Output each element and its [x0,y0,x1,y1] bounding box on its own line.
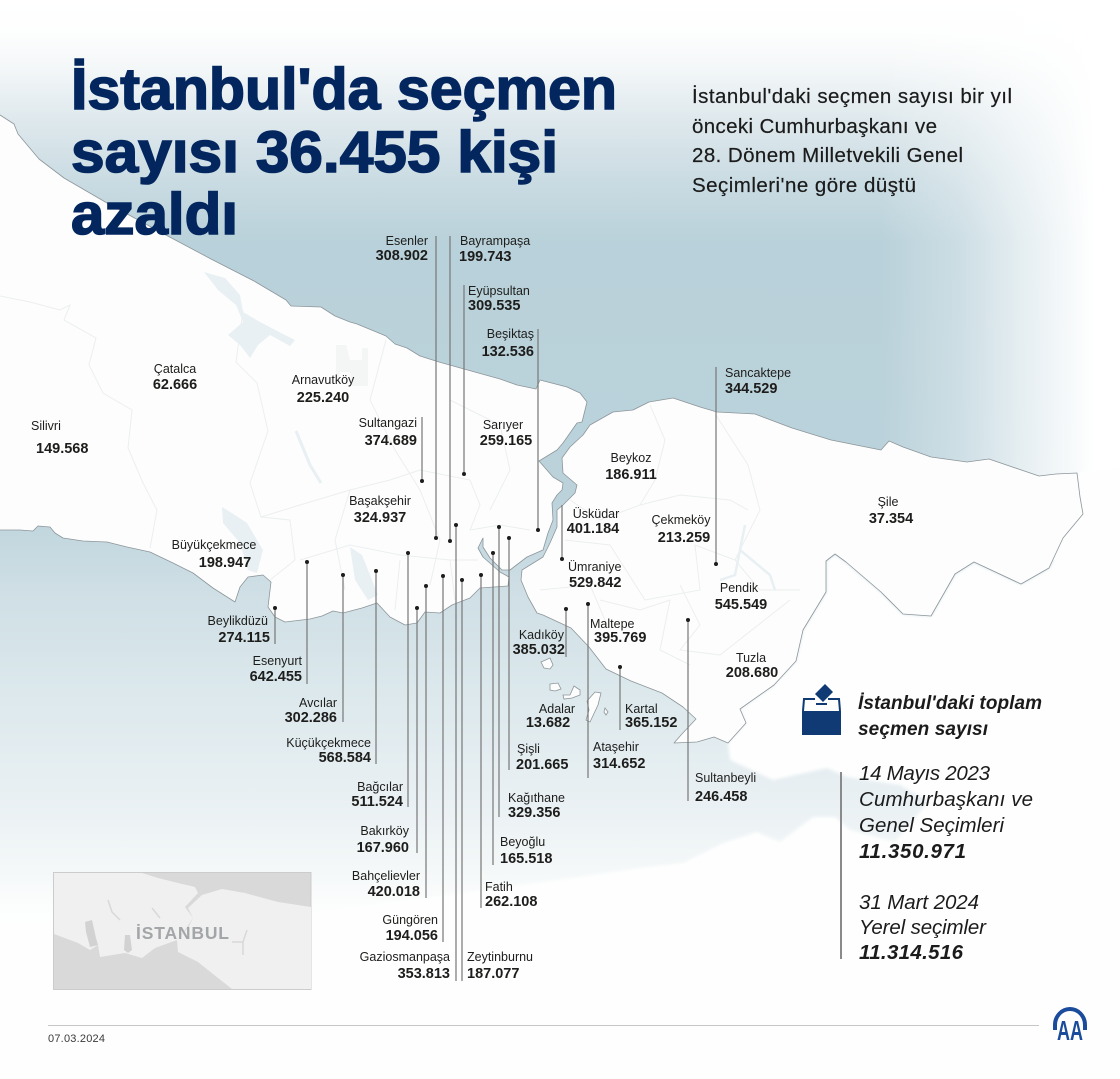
Ümraniye [568,560,622,591]
Arnavutköy: 225.240 [297,390,349,406]
Şişli [507,536,568,773]
Ümraniye: 529.842 [569,575,621,591]
map: eastern and southern surrounding land [0,465,1120,1079]
map: faint tower mark [336,345,368,386]
Avcılar: Avcılar [299,696,337,710]
Bayrampaşa: Bayrampaşa [460,234,530,248]
Fatih [479,573,537,910]
Beyoğlu: Beyoğlu [500,835,545,849]
Sarıyer: 259.165 [480,433,532,449]
Küçükçekmece [286,569,378,766]
Tuzla: 208.680 [726,665,778,681]
14 Mayıs 2023 figures: Genel Seçimleri [859,814,1005,837]
Sancaktepe: Sancaktepe [725,366,791,380]
Esenler: Esenler [386,234,428,248]
Sultanbeyli: 246.458 [695,789,747,805]
Esenyurt: 642.455 [250,669,302,685]
Büyükçekmece: 198.947 [199,555,251,571]
subtitle text block: Seçimleri'ne göre düştü [692,174,916,197]
subtitle text block: İstanbul'daki seçmen sayısı bir yıl [692,85,1012,108]
Silivri: 149.568 [36,441,88,457]
logo: AA [1055,1009,1085,1046]
31 Mart 2024 figures: Yerel seçimler [859,916,987,939]
14 Mayıs 2023 figures: 14 Mayıs 2023 [859,762,991,785]
title: azaldı [71,182,238,247]
Güngören [382,574,445,944]
Zeytinburnu: Zeytinburnu [467,950,533,964]
Fatih: 262.108 [485,894,537,910]
footer rule [48,1025,1039,1026]
Küçükçekmece: 568.584 [319,750,371,766]
Bakırköy: Bakırköy [360,824,410,838]
subtitle text block: önceki Cumhurbaşkanı ve [692,115,937,138]
Beyoğlu: 165.518 [500,851,552,867]
Bahçelievler: 420.018 [368,884,420,900]
inset locator map [54,872,311,990]
Beylikdüzü: 274.115 [218,630,270,646]
Adalar [526,702,575,731]
Ataşehir: 314.652 [593,756,645,772]
Güngören: Güngören [382,913,438,927]
subtitle text block: 28. Dönem Milletvekili Genel [692,144,963,167]
Beşiktaş [482,327,540,532]
date: 07.03.2024 [48,1033,105,1045]
Beşiktaş: 132.536 [482,344,534,360]
Tuzla [726,651,778,681]
Beykoz: Beykoz [610,451,652,465]
Çekmeköy: 213.259 [658,530,710,546]
Şişli: Şişli [517,742,540,756]
Ataşehir [586,602,645,778]
Avcılar [285,573,345,726]
Beykoz: 186.911 [605,467,657,483]
Fatih: Fatih [485,880,513,894]
legend divider bar [840,772,842,959]
Zeytinburnu: 187.077 [467,966,519,982]
Maltepe [590,617,646,646]
Ataşehir: Ataşehir [593,740,639,754]
map: European side of Istanbul [0,113,587,625]
Silivri [31,419,88,457]
Gaziosmanpaşa: 353.813 [398,966,450,982]
Başakşehir: Başakşehir [349,494,411,508]
Eyüpsultan: Eyüpsultan [468,284,530,298]
Maltepe: Maltepe [590,617,635,631]
Sultangazi: Sultangazi [359,416,417,430]
Çekmeköy: Çekmeköy [651,513,711,527]
Bağcılar [351,551,410,810]
map: Asian side of Istanbul [521,398,1083,743]
Sultangazi [359,416,424,483]
Beylikdüzü: Beylikdüzü [208,614,268,628]
Esenyurt: Esenyurt [253,654,303,668]
Kartal: 365.152 [625,715,677,731]
Çatalca [153,362,197,393]
Eyüpsultan [462,284,530,476]
Kadıköy: 385.032 [513,642,565,658]
31 Mart 2024 figures: 31 Mart 2024 [859,891,979,914]
Maltepe: 395.769 [594,630,646,646]
Silivri: Silivri [31,419,61,433]
Beyoğlu [491,551,552,867]
Şile [869,495,913,527]
Avcılar: 302.286 [285,710,337,726]
Bağcılar: 511.524 [351,794,403,810]
Kağıthane [497,525,565,821]
Sarıyer: Sarıyer [483,418,523,432]
Eyüpsultan: 309.535 [468,298,520,314]
Ümraniye: Ümraniye [568,560,622,574]
Pendik [715,581,767,613]
logo: AA: AA [1057,1015,1083,1046]
Zeytinburnu [460,578,533,982]
legend heading: İstanbul'daki toplam [858,693,1042,714]
Bağcılar: Bağcılar [357,780,403,794]
Kadıköy: Kadıköy [519,628,565,642]
Arnavutköy: Arnavutköy [292,373,355,387]
Gaziosmanpaşa [360,523,458,982]
Adalar: Adalar [539,702,575,716]
inset label: İSTANBUL [136,923,229,943]
legend heading: seçmen sayısı [858,719,988,740]
Çatalca: Çatalca [154,362,196,376]
icon: ballot box [802,684,841,735]
Beşiktaş: Beşiktaş [487,327,534,341]
map: Princes' Islands [541,658,608,722]
title: sayısı 36.455 kişi [71,120,558,185]
Güngören: 194.056 [386,928,438,944]
14 Mayıs 2023 figures: Cumhurbaşkanı ve [859,788,1033,811]
Büyükçekmece: Büyükçekmece [172,538,256,552]
subtitle text block [692,85,1012,197]
Esenyurt [250,560,309,685]
Beylikdüzü [208,606,277,646]
title: İstanbul'da seçmen [71,57,617,122]
Başakşehir [349,494,411,526]
31 Mart 2024 figures: 11.314.516 [859,941,964,964]
Üsküdar [560,505,619,561]
Şile: Şile [878,495,898,509]
Şile: 37.354 [869,511,913,527]
Bakırköy: 167.960 [357,840,409,856]
map: district borders, European side [0,296,530,610]
Çatalca: 62.666 [153,377,197,393]
Tuzla: Tuzla [736,651,766,665]
Üsküdar: Üsküdar [573,507,619,521]
Pendik: Pendik [720,581,759,595]
Esenler: 308.902 [376,248,428,264]
title [71,57,617,247]
Şişli: 201.665 [516,757,568,773]
31 Mart 2024 figures [859,891,987,964]
Sancaktepe [714,366,791,566]
Sarıyer [480,418,532,449]
Sultangazi: 374.689 [365,433,417,449]
Bahçelievler: Bahçelievler [352,869,420,883]
Bayrampaşa [448,234,530,543]
district labels [31,234,913,982]
map: district borders, Asian side [540,405,800,665]
Üsküdar: 401.184 [567,521,619,537]
Arnavutköy [292,373,355,406]
Esenler [376,234,438,540]
Beykoz [605,451,657,483]
Kartal [618,665,677,731]
Adalar: 13.682 [526,715,570,731]
Kadıköy [513,607,568,658]
Sancaktepe: 344.529 [725,381,777,397]
Kartal: Kartal [625,702,658,716]
14 Mayıs 2023 figures: 11.350.971 [859,840,966,863]
Bayrampaşa: 199.743 [459,249,511,265]
14 Mayıs 2023 figures [859,762,1033,863]
Pendik: 545.549 [715,597,767,613]
map: Ömerli lake [720,525,775,590]
Bakırköy [357,606,419,856]
map: lakes, European side [204,272,378,600]
Bahçelievler [352,584,428,900]
Gaziosmanpaşa: Gaziosmanpaşa [360,950,450,964]
Sultanbeyli: Sultanbeyli [695,771,756,785]
Küçükçekmece: Küçükçekmece [286,736,371,750]
Sultanbeyli [686,618,756,805]
Büyükçekmece [172,538,256,571]
Kağıthane: Kağıthane [508,791,565,805]
Çekmeköy [651,513,711,546]
panel: total voters legend [840,693,1042,964]
legend heading [858,693,1042,740]
Kağıthane: 329.356 [508,805,560,821]
Başakşehir: 324.937 [354,510,406,526]
